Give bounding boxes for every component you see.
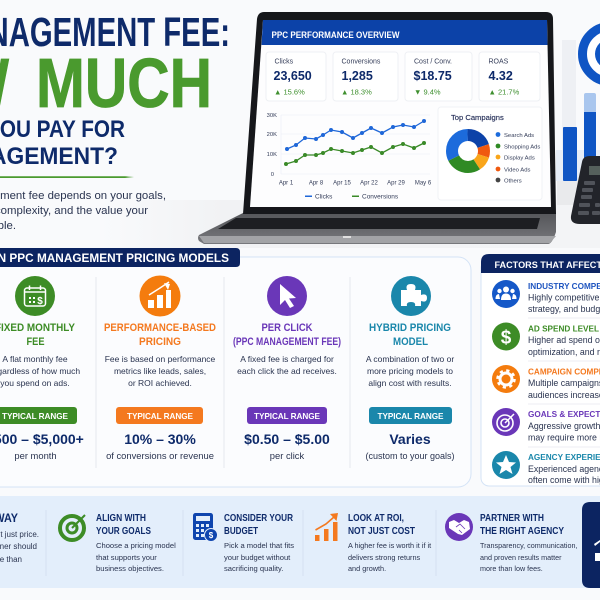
title: MUCH (36, 44, 212, 122)
screen (250, 20, 551, 207)
icon: gear (492, 365, 520, 393)
takeaway: consider your budget: CONSIDER YOUR (224, 513, 294, 524)
model: hybrid pricing: MODEL (393, 336, 428, 348)
chart legend: Conversions (362, 194, 399, 200)
model: per click (233, 276, 341, 461)
laptop bezel (243, 12, 556, 214)
top campaigns donut: Search Ads (504, 133, 534, 139)
takeaway: partner with the right agency: and proven results matter (480, 553, 562, 562)
model: hybrid pricing: (custom to your goals) (365, 451, 455, 461)
laptop base (198, 213, 556, 244)
model: fixed monthly fee: per month (14, 450, 57, 461)
panel: factors that affect your fee (481, 254, 600, 486)
model: hybrid pricing: align cost with results. (368, 378, 452, 388)
icon: dollar: $ (501, 328, 512, 348)
intro text (0, 190, 166, 232)
model: hybrid pricing: Varies (389, 431, 431, 447)
icon: people (492, 280, 520, 308)
icon: calendar dollar (15, 276, 55, 316)
icon: dollar (492, 322, 520, 350)
model: per click: TYPICAL RANGE (254, 412, 321, 421)
factor: ad spend level: AD SPEND LEVEL (528, 324, 599, 334)
takeaway: partner with the right agency (445, 513, 577, 573)
model: per click: $0.50 – $5.00 (244, 431, 330, 447)
takeaway: align with your goals: that supports your (96, 553, 157, 562)
icon: star (492, 451, 520, 479)
factor: campaign complexity (492, 365, 600, 400)
line chart: May 6 (415, 180, 432, 186)
model: per click: per click (270, 450, 304, 461)
model: per click: each click the ad receives. (237, 366, 337, 376)
KPI card: clicks: 23,650 (274, 69, 312, 83)
model: performance-based pricing: metrics like leads, sales, (114, 366, 206, 376)
takeaway: consider your budget: BUDGET (224, 526, 258, 537)
factor: industry competition (492, 280, 600, 314)
icon: calculator: $ (209, 531, 214, 540)
model: fixed monthly fee: FEE (26, 336, 44, 348)
top campaigns donut: Others (504, 178, 522, 184)
model: fixed monthly fee: you spend on ads. (0, 378, 70, 388)
title (0, 9, 230, 170)
icon: rising bars (140, 276, 180, 316)
top campaigns donut: Shopping Ads (504, 144, 540, 150)
KPI card: cost per conversion: $18.75 (414, 69, 452, 83)
takeaway: consider your budget: sacrificing quality. (224, 564, 283, 573)
icon: calendar dollar: $ (37, 296, 43, 307)
model: per click: (PPC MANAGEMENT FEE) (233, 336, 341, 348)
model: performance-based pricing: 10% – 30% (124, 431, 196, 447)
top campaigns donut: Video Ads (504, 168, 530, 174)
title underline (0, 176, 134, 178)
takeaway: align with your goals: Choose a pricing model (96, 541, 176, 550)
takeaway: consider your budget: your budget without (224, 553, 291, 562)
model: hybrid pricing: HYBRID PRICING (369, 322, 451, 334)
factor: goals and expectations (492, 408, 600, 442)
model: fixed monthly fee: TYPICAL RANGE (2, 412, 69, 421)
KPI card: ROAS: 4.32 (488, 69, 513, 83)
icon: target (492, 408, 520, 436)
panel: pricing models (0, 248, 471, 487)
line chart: Apr 1 (279, 180, 294, 186)
decoration: target and bar charts (556, 26, 600, 205)
laptop (198, 12, 556, 244)
KPI card: clicks: ▲ 15.6% (274, 88, 305, 96)
KPI card: cost per conversion (405, 52, 472, 101)
KPI card: conversions: Conversions (342, 58, 381, 66)
chart legend (305, 194, 399, 200)
top campaigns donut: Display Ads (504, 156, 535, 162)
line chart: Apr 15 (333, 180, 351, 186)
model: per click: PER CLICK (262, 322, 313, 334)
KPI card: conversions: ▲ 18.3% (341, 88, 372, 96)
KPI card: conversions: 1,285 (342, 69, 373, 83)
line chart: Apr 8 (309, 180, 324, 186)
KPI card: ROAS (479, 52, 540, 101)
model: performance-based pricing: of conversions or revenue (106, 450, 214, 461)
model: fixed monthly fee (0, 276, 84, 461)
line chart: 0 (271, 172, 274, 178)
line chart: Apr 22 (360, 180, 378, 186)
takeaway: partner with the right agency: Transparency, communication, (480, 541, 577, 550)
takeaway: look at ROI (315, 513, 431, 573)
takeaway: align with your goals: YOUR GOALS (96, 526, 151, 537)
KPI card: cost per conversion: Cost / Conv. (414, 58, 452, 66)
takeaway: look at ROI: NOT JUST COST (348, 526, 415, 537)
model: performance-based pricing: PRICING (139, 336, 181, 348)
model: hybrid pricing (365, 276, 455, 461)
icon: handshake (445, 513, 473, 541)
factor: agency experience (492, 451, 600, 485)
takeaway: partner with the right agency: THE RIGHT AGENCY (480, 526, 564, 537)
dashboard header (262, 20, 548, 45)
takeaway: partner with the right agency: more than low fees. (480, 564, 543, 573)
factor: ad spend level (492, 322, 600, 357)
model: hybrid pricing: A combination of two or (366, 354, 454, 364)
takeaway: look at ROI: A higher fee is worth it if it (348, 541, 431, 550)
icon: ROI chart (315, 513, 338, 541)
KPI card: ROAS: ROAS (488, 58, 509, 66)
model: hybrid pricing: more pricing models to (367, 366, 453, 376)
takeaway: look at ROI: delivers strong returns (348, 553, 421, 562)
KPI card: cost per conversion: ▼ 9.4% (414, 88, 441, 96)
call to action card (582, 502, 600, 588)
model: performance-based pricing: Fee is based on performance (105, 354, 216, 364)
dashboard header: PPC PERFORMANCE OVERVIEW (272, 29, 400, 40)
takeaway: consider your budget (193, 513, 294, 573)
takeaway: align with your goals (60, 513, 176, 573)
KPI card: clicks (266, 52, 326, 101)
calculator (571, 156, 600, 224)
icon: cursor (267, 276, 307, 316)
takeaway: look at ROI: and growth. (348, 564, 386, 573)
icon: green target (60, 515, 85, 540)
line chart: 10K (267, 152, 277, 158)
line chart (267, 113, 432, 200)
takeaway: align with your goals: ALIGN WITH (96, 513, 146, 524)
takeaway: align with your goals: business objectives. (96, 564, 164, 573)
model: per click: A fixed fee is charged for (240, 354, 334, 364)
KPI card: conversions (333, 52, 398, 101)
KPI card: ROAS: ▲ 21.7% (488, 88, 520, 96)
takeaway: consider your budget: Pick a model that fits (224, 541, 294, 550)
line chart: 20K (267, 132, 277, 138)
model: performance-based pricing: or ROI achieved. (128, 378, 192, 388)
top campaigns donut (438, 107, 542, 200)
takeaway: look at ROI: LOOK AT ROI, (348, 513, 404, 524)
takeaway: partner with the right agency: PARTNER WITH (480, 513, 544, 524)
chart legend: Clicks (315, 194, 333, 200)
model: hybrid pricing: TYPICAL RANGE (378, 412, 444, 421)
model: fixed monthly fee: A flat monthly fee (2, 354, 68, 364)
line chart: 30K (267, 113, 277, 119)
model: performance-based pricing: TYPICAL RANGE (127, 412, 194, 421)
takeaway: final way (0, 511, 39, 564)
line chart: Apr 29 (387, 180, 405, 186)
model: performance-based pricing: PERFORMANCE-BASED (104, 322, 216, 334)
icon: puzzle piece (391, 276, 431, 316)
model: performance-based pricing (104, 276, 216, 461)
KPI card: clicks: Clicks (274, 58, 294, 66)
factors heading bar (481, 254, 600, 273)
panel: takeaways band (0, 496, 600, 588)
top campaigns donut: Top Campaigns (451, 113, 504, 122)
